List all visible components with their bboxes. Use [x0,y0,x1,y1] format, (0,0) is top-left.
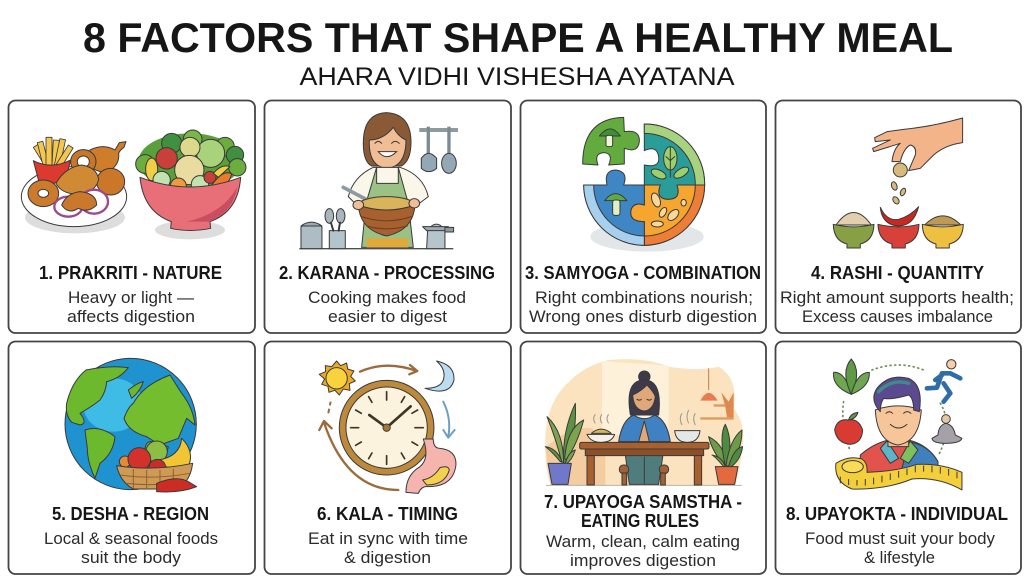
icon: hand measuring food into bowls [833,118,963,248]
icon: globe with fruit basket [65,358,197,492]
description: Right combinations nourish; [535,288,753,307]
panel: 6 Kala [264,342,511,574]
panel: 2 Karana [264,100,511,333]
heading: 6. KALA - TIMING [317,504,458,524]
description: Eat in sync with time [308,529,468,548]
heading: 8. UPAYOKTA - INDIVIDUAL [786,504,1008,524]
description: improves digestion [570,551,716,570]
heading: 2. KARANA - PROCESSING [279,263,495,283]
description: Food must suit your body [805,529,995,548]
heading: 4. RASHI - QUANTITY [811,263,984,283]
description: affects digestion [67,307,195,326]
panel: 8 Upayokta [776,342,1021,574]
heading: 5. DESHA - REGION [52,504,209,524]
description: Heavy or light — [68,288,194,307]
heading: EATING RULES [581,511,699,531]
description: Excess causes imbalance [802,307,993,326]
heading: 7. UPAYOGA SAMSTHA - [544,492,742,512]
description: & digestion [344,548,431,567]
icon: calm person eating at table [545,359,743,485]
icon: person with tape, apple, runner, meditation [834,359,962,490]
description: Local & seasonal foods [44,529,218,548]
icon: fried plate and salad bowl [21,130,246,239]
panel: 5 Desha [8,342,255,574]
heading: 3. SAMYOGA - COMBINATION [525,263,761,283]
panel: 3 Samyoga [520,100,766,333]
description: Cooking makes food [308,288,466,307]
description: Wrong ones disturb digestion [529,307,757,326]
description: suit the body [81,548,182,567]
description: & lifestyle [864,548,935,567]
panel: 7 Upayoga Samstha [520,342,766,574]
panel: 1 Prakriti [8,100,255,333]
heading: 1. PRAKRITI - NATURE [39,263,222,283]
description: easier to digest [328,307,447,326]
title: 8 FACTORS THAT SHAPE A HEALTHY MEAL [83,14,953,61]
icon: woman cooking [299,113,458,249]
description: Warm, clean, calm eating [546,532,740,551]
subtitle: AHARA VIDHI VISHESHA AYATANA [300,63,735,91]
icon: clock, sun, moon and stomach [319,361,456,493]
icon: food puzzle [583,117,705,252]
description: Right amount supports health; [780,288,1014,307]
panel: 4 Rashi [776,100,1021,333]
